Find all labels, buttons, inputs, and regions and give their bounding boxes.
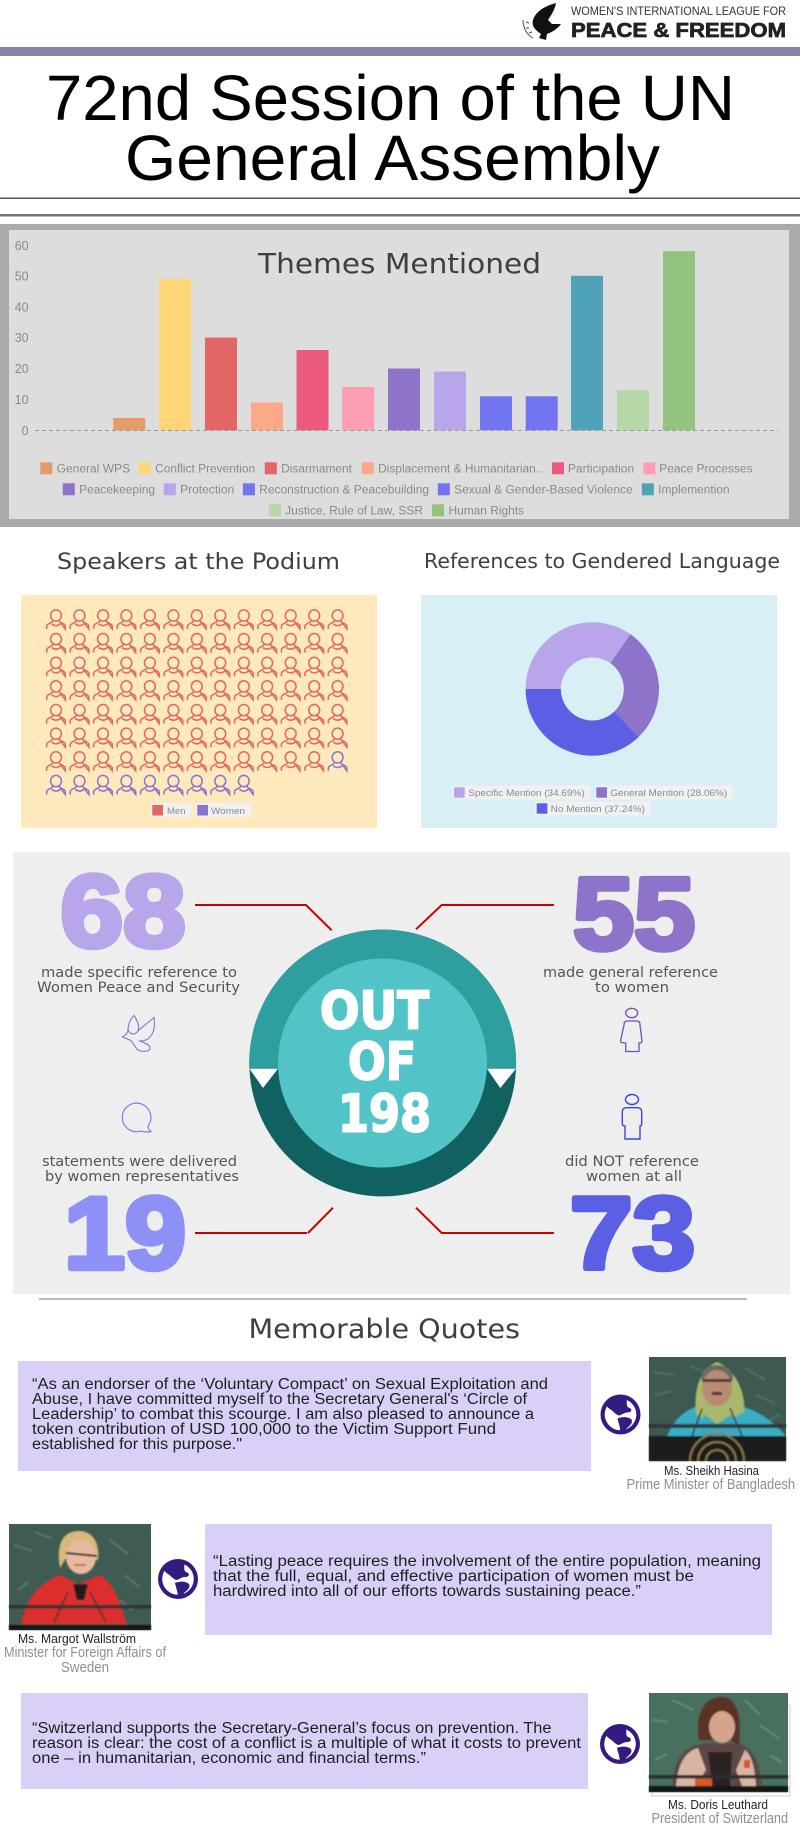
- quote box: [21, 1693, 588, 1789]
- quote box: “As an endorser of the ‘Voluntary Compact’ on Sexual Exploitation and: [32, 1376, 548, 1393]
- speaker caption: Ms. Sheikh Hasina: [664, 1464, 759, 1478]
- chart legend: Disarmament: [281, 463, 353, 475]
- quote box: “Switzerland supports the Secretary-General’s focus on prevention. The: [32, 1720, 552, 1737]
- header bar: [0, 47, 800, 56]
- stat: 55 general reference: 55: [573, 857, 695, 971]
- stat: 19 delivered by women: [42, 1154, 239, 1290]
- circle text: OF: [348, 1032, 416, 1092]
- heading: speakers at the podium: Speakers at the Podium: [57, 550, 340, 575]
- chart legend: Participation: [568, 463, 634, 475]
- panel: out of 198 statistics: [13, 852, 790, 1294]
- title line 1: 72nd Session of the UN: [46, 62, 735, 134]
- circle text: 198: [338, 1084, 431, 1144]
- y axis labels: 20: [15, 362, 29, 376]
- icon: dove logo: [523, 3, 561, 40]
- photo: Sheikh Hasina at podium: [649, 1357, 786, 1461]
- heading: references to gendered language: References to Gendered Language: [424, 549, 780, 573]
- y axis labels: 50: [15, 270, 29, 284]
- stat: 19 delivered by women: by women representatives: [45, 1169, 239, 1185]
- y axis labels: 10: [15, 393, 29, 407]
- quote box: that the full, equal, and effective participation of women must be: [213, 1568, 694, 1585]
- circle text: [320, 982, 431, 1144]
- logo line 2: PEACE & FREEDOM: [571, 20, 786, 42]
- chart title: Themes Mentioned: [257, 247, 541, 280]
- stat: 68 specific reference: made specific reference to: [41, 965, 237, 981]
- speaker caption: Ms. Doris Leuthard: [668, 1798, 768, 1812]
- speaker caption: Sweden: [61, 1659, 109, 1676]
- icon: globe: [600, 1394, 640, 1434]
- chart legend: Protection: [180, 484, 234, 496]
- circle text: OUT: [320, 982, 429, 1042]
- heading: memorable quotes: Memorable Quotes: [248, 1314, 520, 1345]
- chart legend: Sexual & Gender-Based Violence: [454, 484, 633, 496]
- stat: 55 general reference: made general reference: [543, 965, 718, 981]
- chart legend: [40, 462, 753, 517]
- quote box: reason is clear: the cost of a conflict is a multiple of what it costs to prevent: [32, 1735, 582, 1752]
- stat: 19 delivered by women: 19: [64, 1176, 186, 1290]
- panel: gendered language donut chart: [421, 595, 777, 828]
- speaker caption: [4, 1632, 167, 1676]
- chart legend: Peace Processes: [659, 463, 753, 475]
- donut legend: No Mention (37.24%): [551, 804, 645, 815]
- stat: 19 delivered by women: statements were delivered: [42, 1154, 237, 1170]
- y axis labels: 0: [22, 424, 29, 438]
- y axis labels: 60: [15, 239, 29, 253]
- pictogram: 90 men and 10 women: [47, 610, 347, 794]
- icon: globe: [600, 1724, 640, 1764]
- icon: speech bubble: [122, 1103, 151, 1132]
- connector lines: [195, 905, 554, 1233]
- legend: men and women: Men: [167, 806, 186, 817]
- stat: 55 general reference: to women: [595, 980, 669, 996]
- quote box: token contribution of USD 100,000 to the Victim Support Fund: [32, 1421, 496, 1438]
- icon: globe: [158, 1559, 198, 1599]
- chart legend: Justice, Rule of Law, SSR: [285, 505, 423, 517]
- chart legend: Reconstruction & Peacebuilding: [259, 484, 429, 496]
- speaker caption: [626, 1464, 795, 1493]
- quote box: hardwired into all of our efforts towards sustaining peace.”: [213, 1583, 641, 1600]
- quote 3: Doris Leuthard: [21, 1693, 790, 1827]
- stat: 73 no reference: 73: [570, 1176, 695, 1290]
- donut legend: [452, 786, 733, 815]
- photo: Doris Leuthard at podium: [649, 1693, 790, 1796]
- stat: 55 general reference: [543, 857, 718, 996]
- title: [46, 62, 735, 194]
- quote box: [18, 1361, 591, 1471]
- logo: Women's International League for Peace & Freedom: [523, 3, 786, 42]
- quote box: Abuse, I have committed myself to the Secretary General's ‘Circle of: [32, 1391, 528, 1408]
- y axis labels: [15, 239, 29, 438]
- title line 2: General Assembly: [125, 122, 660, 194]
- stat: 68 specific reference: [37, 854, 240, 996]
- icon: person figure: [622, 1094, 642, 1139]
- quote box: “Lasting peace requires the involvement of the entire population, meaning: [213, 1553, 761, 1570]
- quote 2: Margot Wallstrom: [4, 1524, 772, 1676]
- photo: Margot Wallstrom at podium: [9, 1524, 151, 1630]
- donut legend: Specific Mention (34.69%): [468, 788, 585, 799]
- central circle: [249, 930, 516, 1196]
- chart legend: Peacekeeping: [79, 484, 155, 496]
- y axis labels: 30: [15, 331, 29, 345]
- stat: 73 no reference: women at all: [586, 1169, 682, 1185]
- chart legend: Implemention: [658, 484, 730, 496]
- bars: [113, 251, 695, 430]
- chart legend: Displacement & Humanitarian..: [378, 463, 542, 475]
- stat: 73 no reference: did NOT reference: [565, 1154, 699, 1170]
- quote box: established for this purpose.": [32, 1436, 242, 1453]
- panel: speakers pictogram: [21, 595, 377, 828]
- speaker caption: [652, 1798, 788, 1827]
- chart legend: Conflict Prevention: [155, 463, 255, 475]
- speaker caption: Ms. Margot Wallström: [18, 1632, 136, 1646]
- icon: dove: [122, 1016, 154, 1051]
- legend: men and women: [151, 803, 251, 817]
- donut chart: [526, 622, 659, 756]
- chart legend: Human Rights: [448, 505, 524, 517]
- icon: woman figure: [620, 1008, 642, 1052]
- quote box: one – in humanitarian, economic and financial terms.”: [32, 1750, 426, 1767]
- stat: 68 specific reference: Women Peace and Security: [37, 980, 240, 996]
- speaker caption: Minister for Foreign Affairs of: [4, 1644, 167, 1661]
- stat: 68 specific reference: 68: [60, 854, 186, 968]
- quote box: [205, 1524, 772, 1635]
- donut legend: General Mention (28.06%): [610, 788, 727, 799]
- y axis labels: 40: [15, 300, 29, 314]
- quote 1: Sheikh Hasina: [18, 1357, 795, 1493]
- legend: men and women: Women: [211, 806, 245, 817]
- chart legend: General WPS: [57, 463, 130, 475]
- panel: themes mentioned bar chart: [0, 224, 800, 527]
- quote box: Leadership’ to combat this scourge. I am also pleased to announce a: [32, 1406, 534, 1423]
